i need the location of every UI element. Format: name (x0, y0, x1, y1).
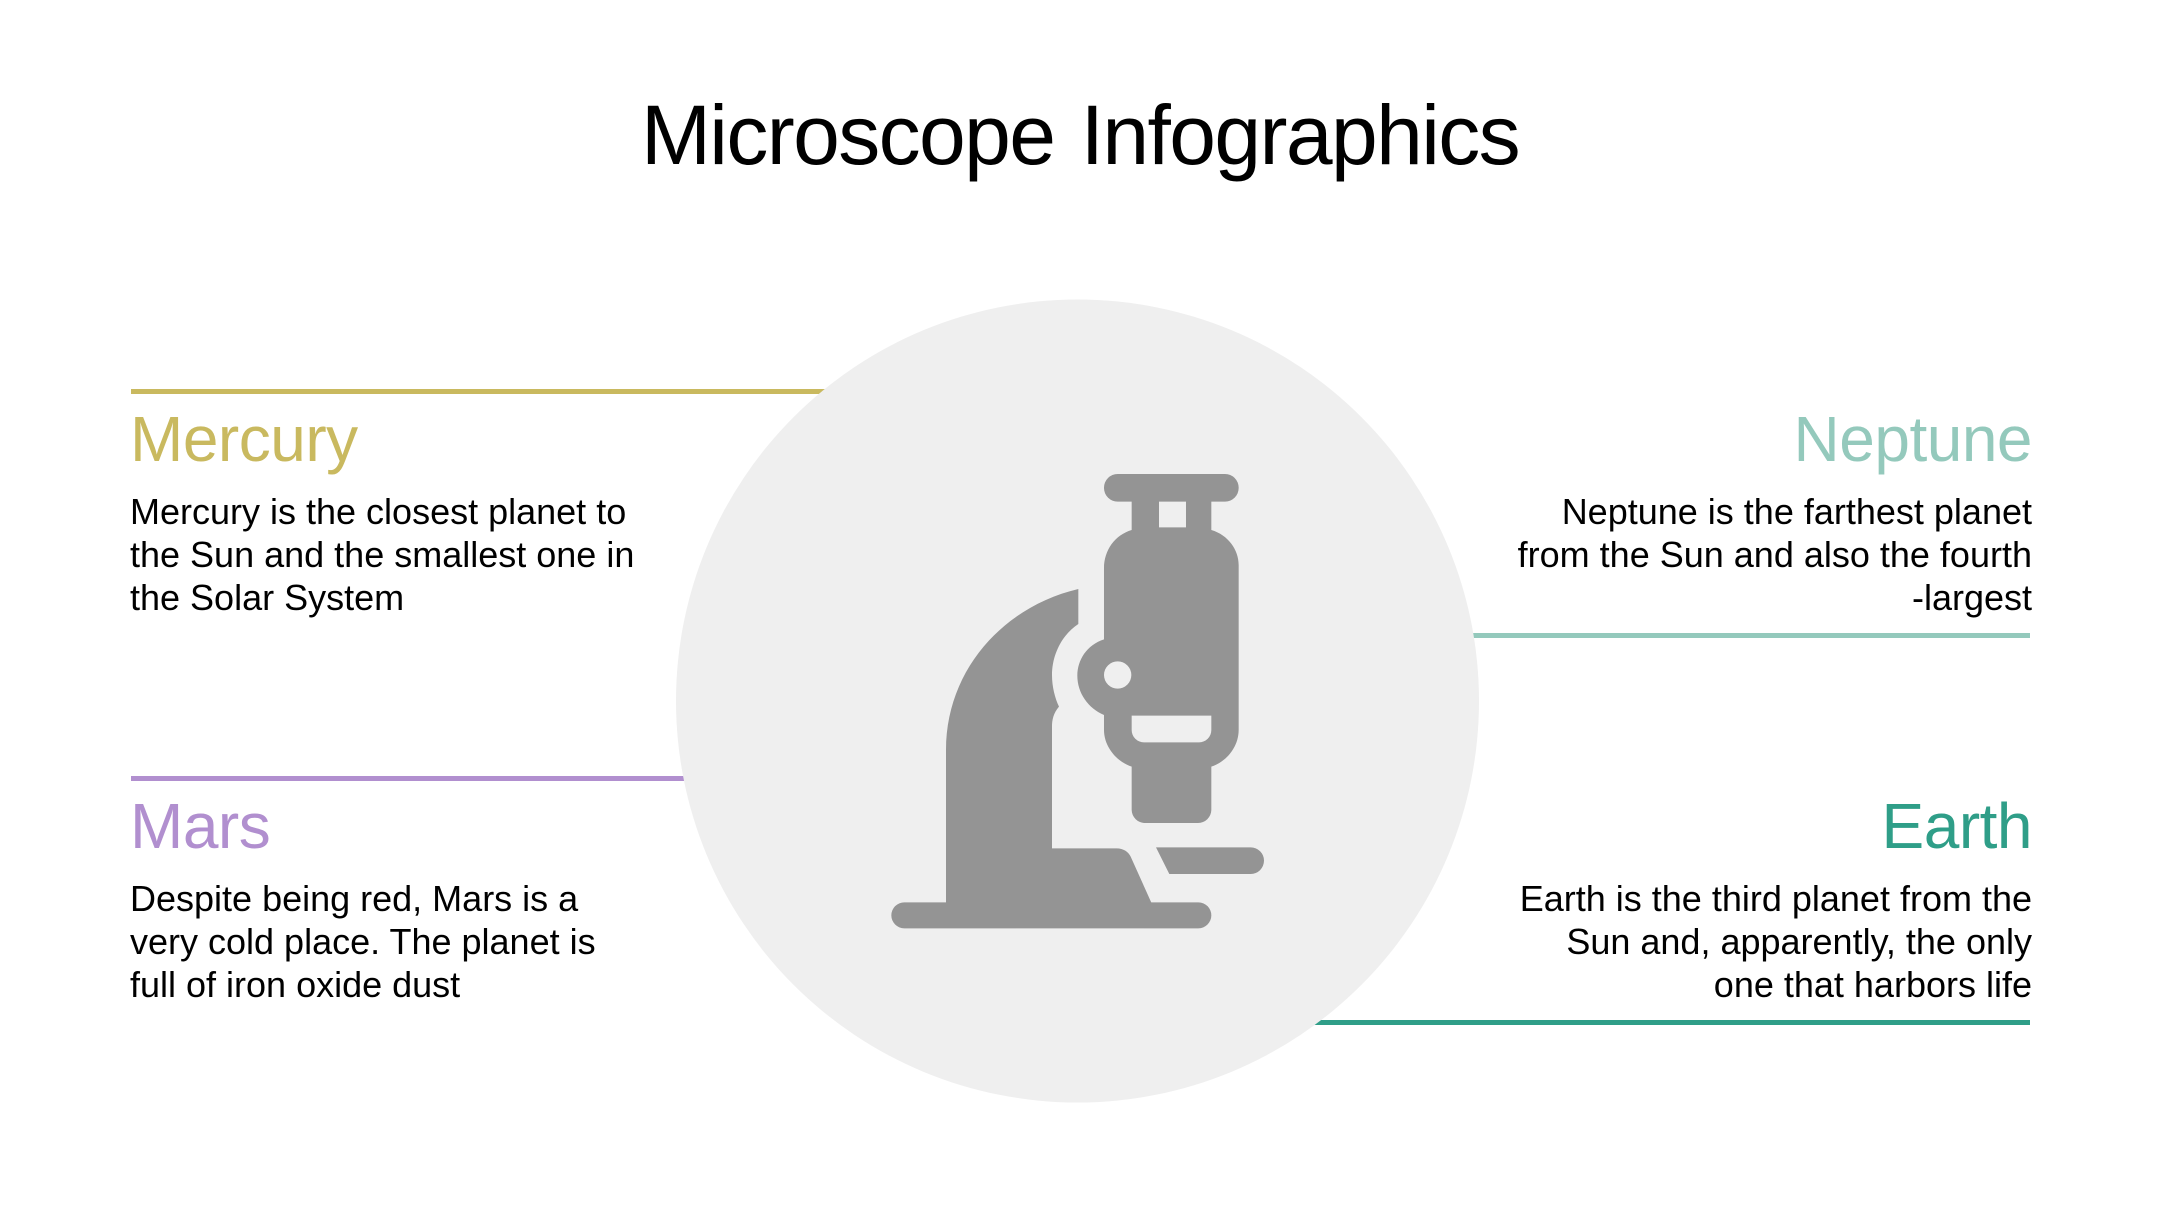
panel: Mars (130, 790, 596, 1005)
line: Mars (131, 776, 731, 780)
icon: microscope (891, 474, 1264, 928)
line: Mercury (131, 389, 851, 394)
text: Mars description: very cold place. The planet is (130, 921, 596, 962)
heading: Mercury: Mercury (130, 403, 358, 475)
text: Earth description: Earth is the third planet from the (1520, 878, 2032, 919)
heading: Neptune: Neptune (1794, 403, 2032, 475)
text: Mercury description: Mercury is the closest planet to (130, 491, 626, 532)
text: Mercury description: the Solar System (130, 577, 404, 618)
text: Mercury description: the Sun and the smallest one in (130, 534, 634, 575)
text: Mars description: Despite being red, Mars is a (130, 878, 578, 919)
line: Neptune (1440, 633, 2030, 638)
panel: Earth (1520, 790, 2032, 1005)
heading: Mars: Mars (130, 790, 270, 862)
panel: Mercury (130, 403, 634, 618)
line: Earth (1280, 1020, 2030, 1024)
text: Neptune description: from the Sun and also the fourth (1518, 534, 2032, 575)
panel: Neptune (1518, 403, 2032, 618)
title: Microscope Infographics (641, 88, 1519, 182)
text: Neptune description: Neptune is the farthest planet (1562, 491, 2032, 532)
text: Mercury description (130, 491, 634, 618)
text: Neptune description (1518, 491, 2032, 618)
text: Earth description (1520, 878, 2032, 1005)
text: Mars description: full of iron oxide dust (130, 964, 460, 1005)
text: Earth description: one that harbors life (1714, 964, 2032, 1005)
text: Neptune description: -largest (1912, 577, 2032, 618)
text: Mars description (130, 878, 596, 1005)
text: Earth description: Sun and, apparently, the only (1566, 921, 2032, 962)
heading: Earth: Earth (1882, 790, 2032, 862)
